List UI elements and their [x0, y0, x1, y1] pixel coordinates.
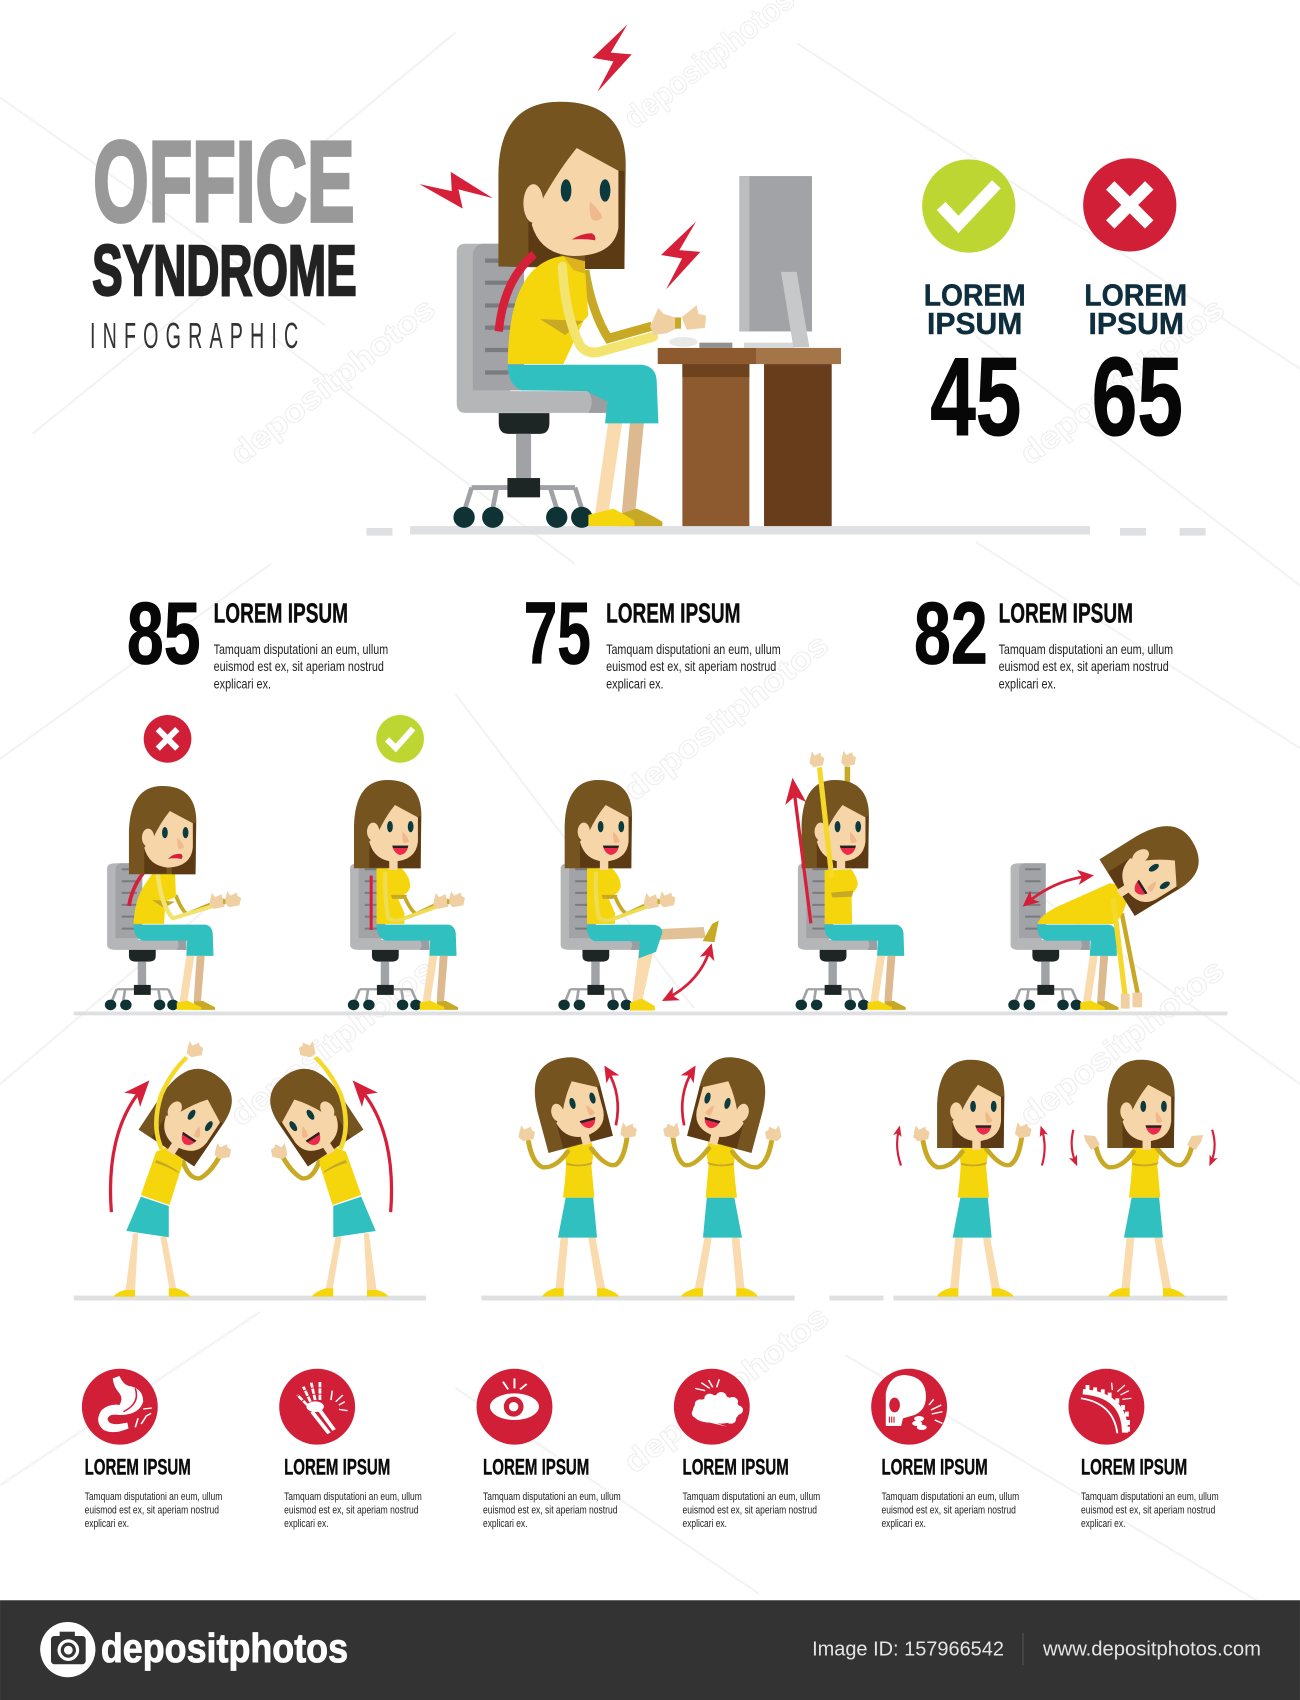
stat block: 85: Tamquam disputationi an eum, ullum	[214, 641, 388, 657]
info block 1	[85, 1454, 222, 1530]
background watermark: depositphotos	[617, 627, 835, 808]
stat: 45: IPSUM	[927, 308, 1022, 341]
info block 2: LOREM IPSUM	[284, 1454, 390, 1479]
background watermark: depositphotos	[1013, 291, 1231, 472]
title: INFOGRAPHIC	[90, 317, 305, 357]
stat block: 75: 75	[524, 585, 591, 683]
stat block: 85: euismod est ex, sit aperiam nostrud	[214, 658, 384, 674]
info block 5: LOREM IPSUM	[881, 1454, 988, 1479]
info block 1: euismod est ex, sit aperiam nostrud	[85, 1505, 219, 1517]
icon: small green check	[376, 715, 424, 763]
main illustration: office worker at desk in pain	[410, 25, 1090, 535]
stat block: 85: LOREM IPSUM	[214, 596, 348, 628]
seated worker	[498, 102, 706, 526]
figure: bad sitting posture	[105, 786, 241, 1010]
icon: red cross	[1083, 158, 1176, 252]
info block 2	[284, 1454, 422, 1530]
stat: 65: LOREM	[1084, 280, 1187, 313]
figure: head tilt right	[663, 1050, 781, 1297]
info block 5: Tamquam disputationi an eum, ullum	[881, 1491, 1019, 1503]
info block 4: euismod est ex, sit aperiam nostrud	[683, 1505, 817, 1517]
stat block: 75: explicari ex.	[606, 675, 664, 691]
background watermark: depositphotos	[223, 952, 442, 1133]
arrow: upward stretch	[794, 787, 811, 923]
info block 5: euismod est ex, sit aperiam nostrud	[881, 1505, 1016, 1517]
info block 3	[483, 1454, 621, 1530]
standing floor lines	[74, 1296, 1227, 1300]
info block 2: euismod est ex, sit aperiam nostrud	[284, 1505, 419, 1517]
footer image id: Image ID: 157966542	[812, 1639, 1004, 1661]
figure: shoulder raise	[897, 1060, 1045, 1297]
figure: shoulder lower	[1072, 1060, 1215, 1297]
stat block: 82: LOREM IPSUM	[999, 596, 1133, 628]
arrows: shoulders down	[1072, 1130, 1215, 1162]
info block 3: explicari ex.	[483, 1518, 527, 1530]
stat block: 75: Tamquam disputationi an eum, ullum	[606, 641, 781, 657]
icon: stomach	[82, 1369, 158, 1445]
stat block: 85: explicari ex.	[214, 675, 271, 691]
icon: wrist bones	[279, 1369, 355, 1445]
info block 1: Tamquam disputationi an eum, ullum	[85, 1491, 222, 1503]
office chair	[453, 244, 607, 528]
figure: arms raised exercise	[794, 751, 906, 1010]
info block 6: explicari ex.	[1081, 1518, 1125, 1530]
arrow: head tilt	[607, 1070, 618, 1125]
figure: good sitting posture	[348, 780, 465, 1010]
footer logo	[40, 1622, 348, 1677]
figure: side bend left	[111, 1041, 243, 1297]
title: OFFICE	[93, 119, 355, 246]
stat block: 85: 85	[127, 585, 201, 683]
ground dashes	[366, 528, 1206, 536]
stat block: 82: euismod est ex, sit aperiam nostrud	[999, 658, 1169, 674]
icon: small red cross	[144, 715, 191, 763]
info block 2: explicari ex.	[284, 1518, 329, 1530]
background watermark: depositphotos	[617, 1299, 835, 1480]
icon: brain	[674, 1369, 750, 1445]
arrow: leg motion	[667, 949, 710, 999]
footer bar	[0, 1600, 1300, 1700]
info block 6: Tamquam disputationi an eum, ullum	[1081, 1491, 1219, 1503]
info block 3: Tamquam disputationi an eum, ullum	[483, 1491, 621, 1503]
info block 4: explicari ex.	[683, 1518, 727, 1530]
info block 4: LOREM IPSUM	[683, 1454, 789, 1479]
stat: 65: IPSUM	[1089, 308, 1184, 341]
footer url: www.depositphotos.com	[1042, 1639, 1261, 1661]
info block 4	[683, 1454, 820, 1530]
info block 6: euismod est ex, sit aperiam nostrud	[1081, 1505, 1215, 1517]
stat: 45: 45	[930, 334, 1021, 459]
stat block: 75: euismod est ex, sit aperiam nostrud	[606, 658, 776, 674]
stat block: 82: Tamquam disputationi an eum, ullum	[999, 641, 1173, 657]
ground line	[410, 526, 1090, 535]
figure: forward bend exercise	[1008, 813, 1210, 1010]
arrows: shoulders up	[897, 1130, 1045, 1165]
info block 5	[881, 1454, 1019, 1530]
figure: leg extension exercise	[558, 780, 719, 1010]
title	[90, 119, 357, 357]
stat: 65: 65	[1092, 334, 1183, 459]
arrow: side bend mirrored	[359, 1087, 392, 1212]
info block 3: LOREM IPSUM	[483, 1454, 589, 1479]
info block 5: explicari ex.	[881, 1518, 926, 1530]
arrow: head tilt mirrored	[682, 1070, 693, 1125]
pain bolts	[419, 25, 700, 289]
background watermark: depositphotos	[223, 291, 442, 472]
icon: eye	[477, 1369, 552, 1445]
title: SYNDROME	[92, 231, 357, 311]
stat: 65	[1084, 280, 1187, 459]
arrow: side bend	[111, 1087, 143, 1212]
figure: head tilt left	[519, 1050, 637, 1297]
footer logo: depositphotos	[101, 1625, 348, 1671]
stat block: 82	[914, 585, 1173, 691]
background watermark: depositphotos	[1013, 952, 1231, 1133]
stat block: 85	[127, 585, 388, 691]
stat block: 75: LOREM IPSUM	[606, 596, 741, 628]
stat: 45: LOREM	[924, 280, 1026, 313]
info block 4: Tamquam disputationi an eum, ullum	[683, 1491, 820, 1503]
desk	[658, 348, 841, 526]
info block 6: LOREM IPSUM	[1081, 1454, 1187, 1479]
icon: spine	[1068, 1369, 1144, 1445]
stat block: 75	[524, 585, 781, 691]
info block 3: euismod est ex, sit aperiam nostrud	[483, 1505, 617, 1517]
icon: skull	[871, 1369, 947, 1445]
stat: 45	[924, 280, 1026, 459]
computer monitor, keyboard and mouse	[669, 176, 812, 348]
info block 6	[1081, 1454, 1219, 1530]
info block 1: explicari ex.	[85, 1518, 129, 1530]
stat block: 82: explicari ex.	[999, 675, 1056, 691]
info block 2: Tamquam disputationi an eum, ullum	[284, 1491, 422, 1503]
arrow: bend motion	[1027, 876, 1089, 903]
stat block: 82: 82	[914, 585, 988, 683]
seated floor line	[74, 1012, 1227, 1015]
info block 1: LOREM IPSUM	[85, 1454, 191, 1479]
figure: side bend right	[259, 1041, 392, 1297]
icon: green check	[922, 159, 1015, 253]
